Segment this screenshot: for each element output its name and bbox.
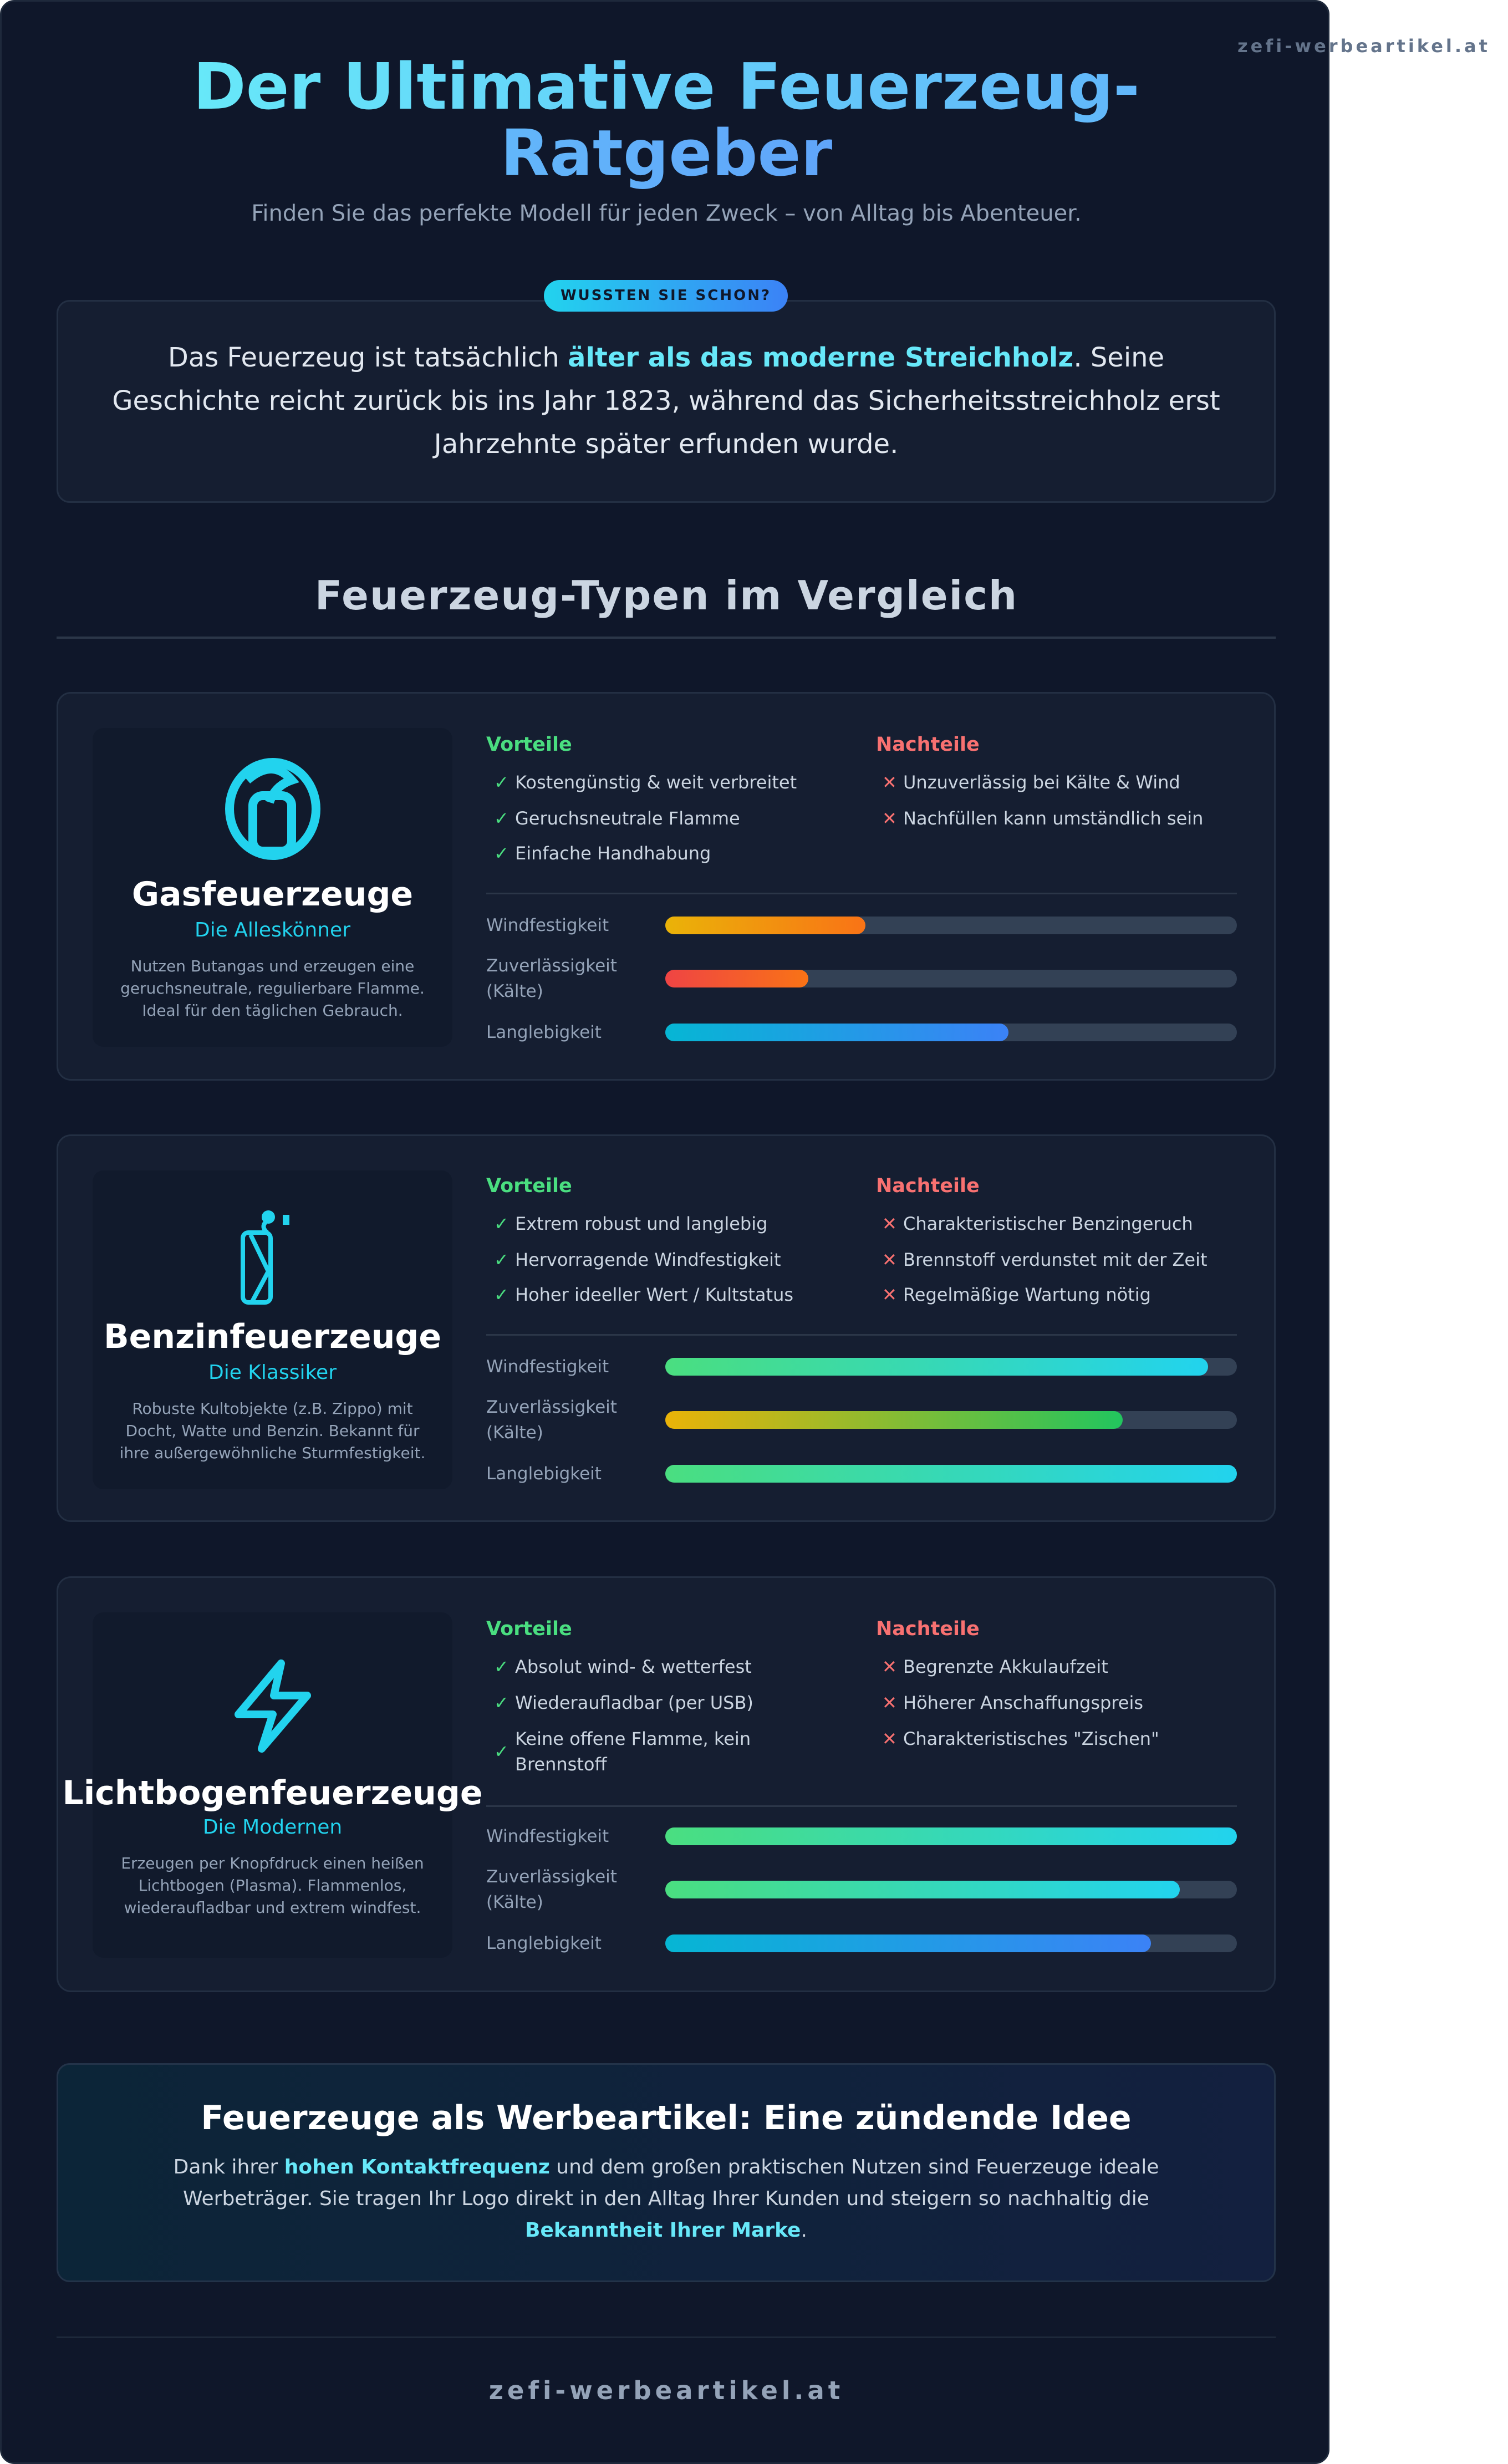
card: Gasfeuerzeuge (57, 692, 1276, 1081)
promo text: Bekanntheit Ihrer Marke. (525, 2219, 807, 2242)
watermark top right: zefi-werbeartikel.at (1237, 35, 1490, 57)
promo text (174, 2156, 1159, 2242)
rating bars: Windfestigkeit (486, 1826, 609, 1846)
cons list: Charakteristischer Benzingeruch (903, 1213, 1193, 1234)
cons list: ✕ (882, 1728, 897, 1749)
description: Ideal für den täglichen Gebrauch. (142, 1001, 403, 1020)
description (120, 957, 425, 1020)
rating bars (486, 1357, 1237, 1484)
description (121, 1854, 424, 1917)
cons list: Unzuverlässig bei Kälte & Wind (903, 772, 1180, 793)
description: Lichtbogen (Plasma). Flammenlos, (139, 1876, 406, 1895)
card: Lichtbogenfeuerzeuge (57, 1576, 1276, 1992)
subtitle: Die Alleskönner (195, 919, 350, 941)
subtitle: Finden Sie das perfekte Modell für jeden Zweck – von Alltag bis Abenteuer. (251, 201, 1082, 226)
title: Ratgeber (501, 116, 832, 191)
title (193, 50, 1140, 191)
icon: lightning bolt (235, 1659, 311, 1753)
promo text: Werbeträger. Sie tragen Ihr Logo direkt in den Alltag Ihrer Kunden und steigern so nachhaltig die (183, 2187, 1149, 2210)
footer: zefi-werbeartikel.at (489, 2376, 844, 2405)
fact text: Das Feuerzeug ist tatsächlich älter als das moderne Streichholz. Seine (168, 342, 1164, 373)
section heading: Feuerzeug-Typen im Vergleich (315, 572, 1018, 619)
description: Docht, Watte und Benzin. Bekannt für (126, 1422, 419, 1440)
cons list: Begrenzte Akkulaufzeit (903, 1656, 1108, 1677)
pros list: ✓ (494, 1213, 509, 1234)
pros list: ✓ (494, 1249, 509, 1270)
subtitle: Die Klassiker (208, 1361, 337, 1384)
badge: WUSSTEN SIE SCHON? (561, 287, 771, 304)
cons list: ✕ (882, 1213, 897, 1234)
rating bars: Langlebigkeit (486, 1933, 602, 1953)
pros list: Keine offene Flamme, kein (515, 1728, 751, 1749)
description (120, 1399, 425, 1462)
badge (544, 280, 788, 312)
left panel (93, 1612, 452, 1958)
rating bars: Langlebigkeit (486, 1022, 602, 1042)
rating bars: Zuverlässigkeit (486, 1397, 617, 1417)
fact text: Geschichte reicht zurück bis ins Jahr 1823, während das Sicherheitsstreichholz erst (112, 385, 1220, 416)
description: ihre außergewöhnliche Sturmfestigkeit. (120, 1444, 425, 1462)
pros list (494, 772, 797, 864)
fact text: Jahrzehnte später erfunden wurde. (434, 429, 898, 460)
rating bars: (Kälte) (486, 1892, 543, 1912)
cons list: Regelmäßige Wartung nötig (903, 1284, 1151, 1305)
pros list (494, 1213, 793, 1305)
left panel (93, 1170, 452, 1489)
rating bars: Zuverlässigkeit (486, 956, 617, 976)
pros list: Hoher ideeller Wert / Kultstatus (515, 1284, 793, 1305)
pros list: Kostengünstig & weit verbreitet (515, 772, 797, 793)
pros list (494, 1656, 753, 1775)
title: Der Ultimative Feuerzeug- (193, 50, 1140, 124)
cons list (882, 772, 1203, 829)
pros list: Hervorragende Windfestigkeit (515, 1249, 781, 1270)
cons list: Brennstoff verdunstet mit der Zeit (903, 1249, 1208, 1270)
cons list: ✕ (882, 1656, 897, 1677)
cons list: Höherer Anschaffungspreis (903, 1692, 1143, 1713)
pros list: ✓ (494, 1656, 509, 1677)
description: Robuste Kultobjekte (z.B. Zippo) mit (132, 1399, 413, 1418)
name: Gasfeuerzeuge (132, 875, 413, 914)
description: Nutzen Butangas und erzeugen eine (131, 957, 414, 975)
rating bars: Zuverlässigkeit (486, 1867, 617, 1887)
pros list: Einfache Handhabung (515, 843, 711, 864)
cons list: ✕ (882, 772, 897, 793)
description: wiederaufladbar und extrem windfest. (124, 1898, 421, 1917)
promo text: Dank ihrer hohen Kontaktfrequenz und dem großen praktischen Nutzen sind Feuerzeuge ideale (174, 2156, 1159, 2178)
cons list: ✕ (882, 1249, 897, 1270)
left panel (93, 728, 452, 1047)
description: geruchsneutrale, regulierbare Flamme. (120, 979, 425, 997)
pros heading: Vorteile (486, 1618, 572, 1640)
cons heading: Nachteile (876, 734, 980, 756)
rating bars: Windfestigkeit (486, 915, 609, 935)
rating bars (486, 1826, 1237, 1953)
pros heading: Vorteile (486, 1175, 572, 1197)
promo box (57, 2063, 1276, 2282)
rating bars: (Kälte) (486, 981, 543, 1001)
fact text (112, 342, 1220, 460)
pros list: Wiederaufladbar (per USB) (515, 1692, 753, 1713)
cons list (882, 1656, 1159, 1749)
pros list: ✓ (494, 843, 509, 864)
name: Benzinfeuerzeuge (104, 1317, 441, 1356)
description: Erzeugen per Knopfdruck einen heißen (121, 1854, 424, 1872)
subtitle: Die Modernen (203, 1816, 342, 1839)
pros list: ✓ (494, 808, 509, 829)
rating bars: Langlebigkeit (486, 1464, 602, 1484)
rating bars: (Kälte) (486, 1423, 543, 1443)
pros heading: Vorteile (486, 734, 572, 756)
rating bars (486, 915, 1237, 1042)
pros list: ✓ (494, 1284, 509, 1305)
fact box (57, 300, 1276, 503)
card: Benzinfeuerzeuge (57, 1134, 1276, 1522)
rating bars: Windfestigkeit (486, 1357, 609, 1377)
pros list: Geruchsneutrale Flamme (515, 808, 740, 829)
cons heading: Nachteile (876, 1618, 980, 1640)
cons list: Nachfüllen kann umständlich sein (903, 808, 1203, 829)
cons list: ✕ (882, 808, 897, 829)
pros list: Absolut wind- & wetterfest (515, 1656, 752, 1677)
cons list: Charakteristisches "Zischen" (903, 1728, 1159, 1749)
cons heading: Nachteile (876, 1175, 980, 1197)
name: Lichtbogenfeuerzeuge (62, 1774, 483, 1813)
pros list: Extrem robust und langlebig (515, 1213, 767, 1234)
cons list: ✕ (882, 1284, 897, 1305)
promo title: Feuerzeuge als Werbeartikel: Eine zündende Idee (201, 2099, 1132, 2137)
cons list (882, 1213, 1208, 1305)
pros list: Brennstoff (515, 1754, 607, 1775)
cons list: ✕ (882, 1692, 897, 1713)
icon: gas lighter (225, 758, 320, 860)
pros list: ✓ (494, 1741, 509, 1762)
icon: petrol lighter (241, 1210, 289, 1305)
pros list: ✓ (494, 772, 509, 793)
pros list: ✓ (494, 1692, 509, 1713)
